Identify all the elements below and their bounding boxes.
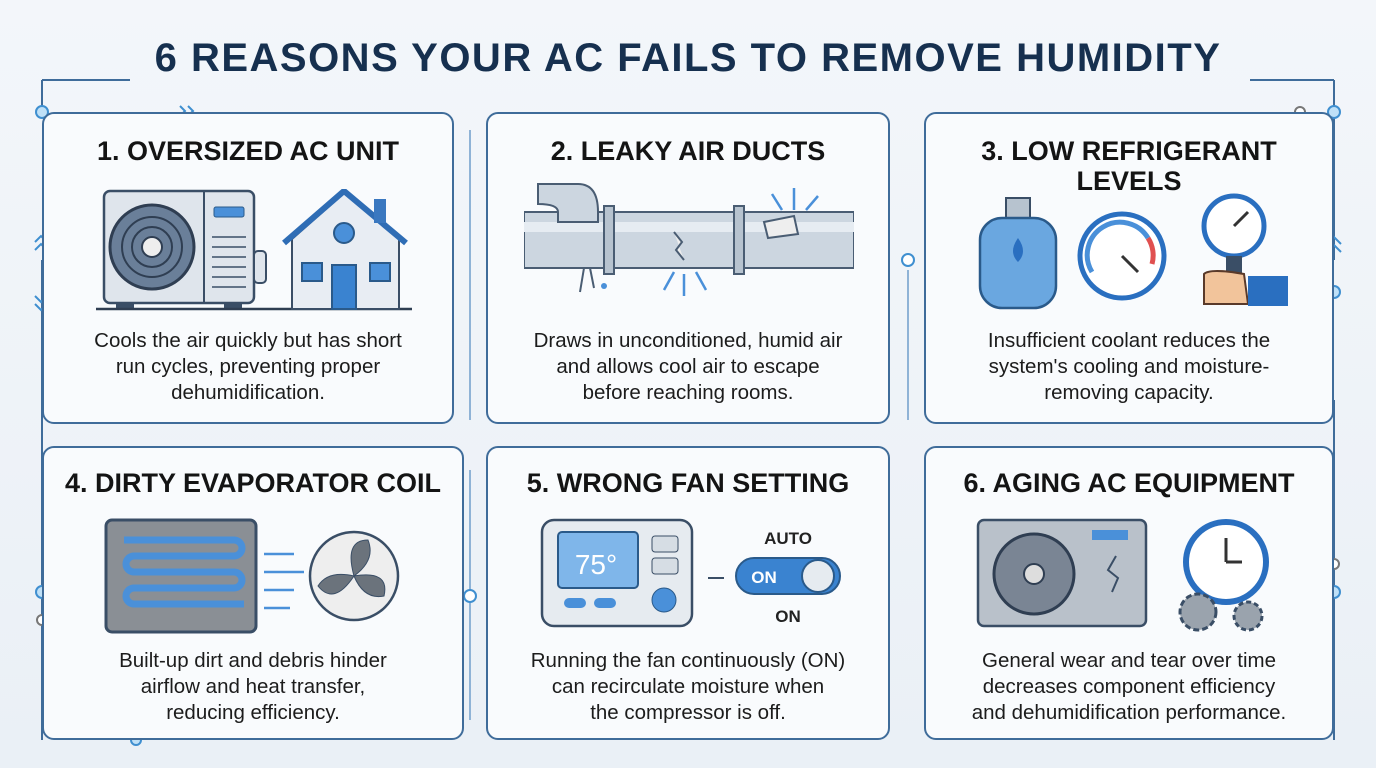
panel: 2 leaky air ducts — [486, 112, 890, 424]
text 1: run cycles, preventing proper — [116, 355, 380, 378]
heading 3: 3. LOW REFRIGERANT — [981, 136, 1277, 166]
text 2 — [534, 329, 842, 404]
icon: leaky duct — [524, 183, 854, 296]
panel: 6 aging equipment — [924, 446, 1334, 740]
text 4: Built-up dirt and debris hinder — [119, 649, 387, 672]
panel: 3 low refrigerant — [924, 112, 1334, 424]
text 4: reducing efficiency. — [166, 701, 340, 724]
text 1: Cools the air quickly but has short — [94, 329, 402, 352]
heading 1: 1. OVERSIZED AC UNIT — [97, 136, 399, 166]
panel: 1 oversized ac unit — [42, 112, 454, 424]
text 1: dehumidification. — [171, 381, 325, 404]
heading 2: 2. LEAKY AIR DUCTS — [551, 136, 825, 166]
text 5: the compressor is off. — [590, 701, 786, 724]
heading 5: 5. WRONG FAN SETTING — [527, 468, 849, 498]
text 2: and allows cool air to escape — [556, 355, 820, 378]
text 3: system's cooling and moisture- — [989, 355, 1269, 378]
text 5: Running the fan continuously (ON) — [531, 649, 845, 672]
heading 4: 4. DIRTY EVAPORATOR COIL — [65, 468, 441, 498]
text 3: removing capacity. — [1044, 381, 1214, 404]
text 2: before reaching rooms. — [583, 381, 793, 404]
text 3: Insufficient coolant reduces the — [988, 329, 1270, 352]
text 4: airflow and heat transfer, — [141, 675, 365, 698]
panel: 5 wrong fan setting — [486, 446, 890, 740]
text 6: General wear and tear over time — [982, 649, 1276, 672]
text 4 — [119, 649, 387, 724]
heading 3 — [981, 136, 1277, 196]
title: 6 REASONS YOUR AC FAILS TO REMOVE HUMIDITY — [155, 36, 1221, 80]
icon: thermostat and switch: AUTO — [764, 529, 812, 548]
heading 6: 6. AGING AC EQUIPMENT — [963, 468, 1295, 498]
icon: thermostat and switch: ON — [751, 568, 777, 587]
icon: tank, gauge, hand gauge — [978, 194, 1288, 310]
text 6 — [972, 649, 1286, 724]
text 3 — [988, 329, 1270, 404]
panel: 4 dirty coil — [42, 446, 464, 740]
icon: old ac, clock, gears — [976, 518, 1269, 632]
heading 3: LEVELS — [1076, 166, 1182, 196]
icon: dirty coil and fan — [104, 518, 400, 634]
text 5 — [531, 649, 845, 724]
icon: ac unit and house — [96, 189, 412, 310]
icon: thermostat and switch: ON — [775, 607, 801, 626]
text 1 — [94, 329, 402, 404]
text 6: and dehumidification performance. — [972, 701, 1286, 724]
text 6: decreases component efficiency — [983, 675, 1275, 698]
text 5: can recirculate moisture when — [552, 675, 824, 698]
icon: thermostat and switch: 75° — [575, 549, 617, 580]
icon: thermostat and switch — [540, 518, 841, 628]
text 2: Draws in unconditioned, humid air — [534, 329, 842, 352]
